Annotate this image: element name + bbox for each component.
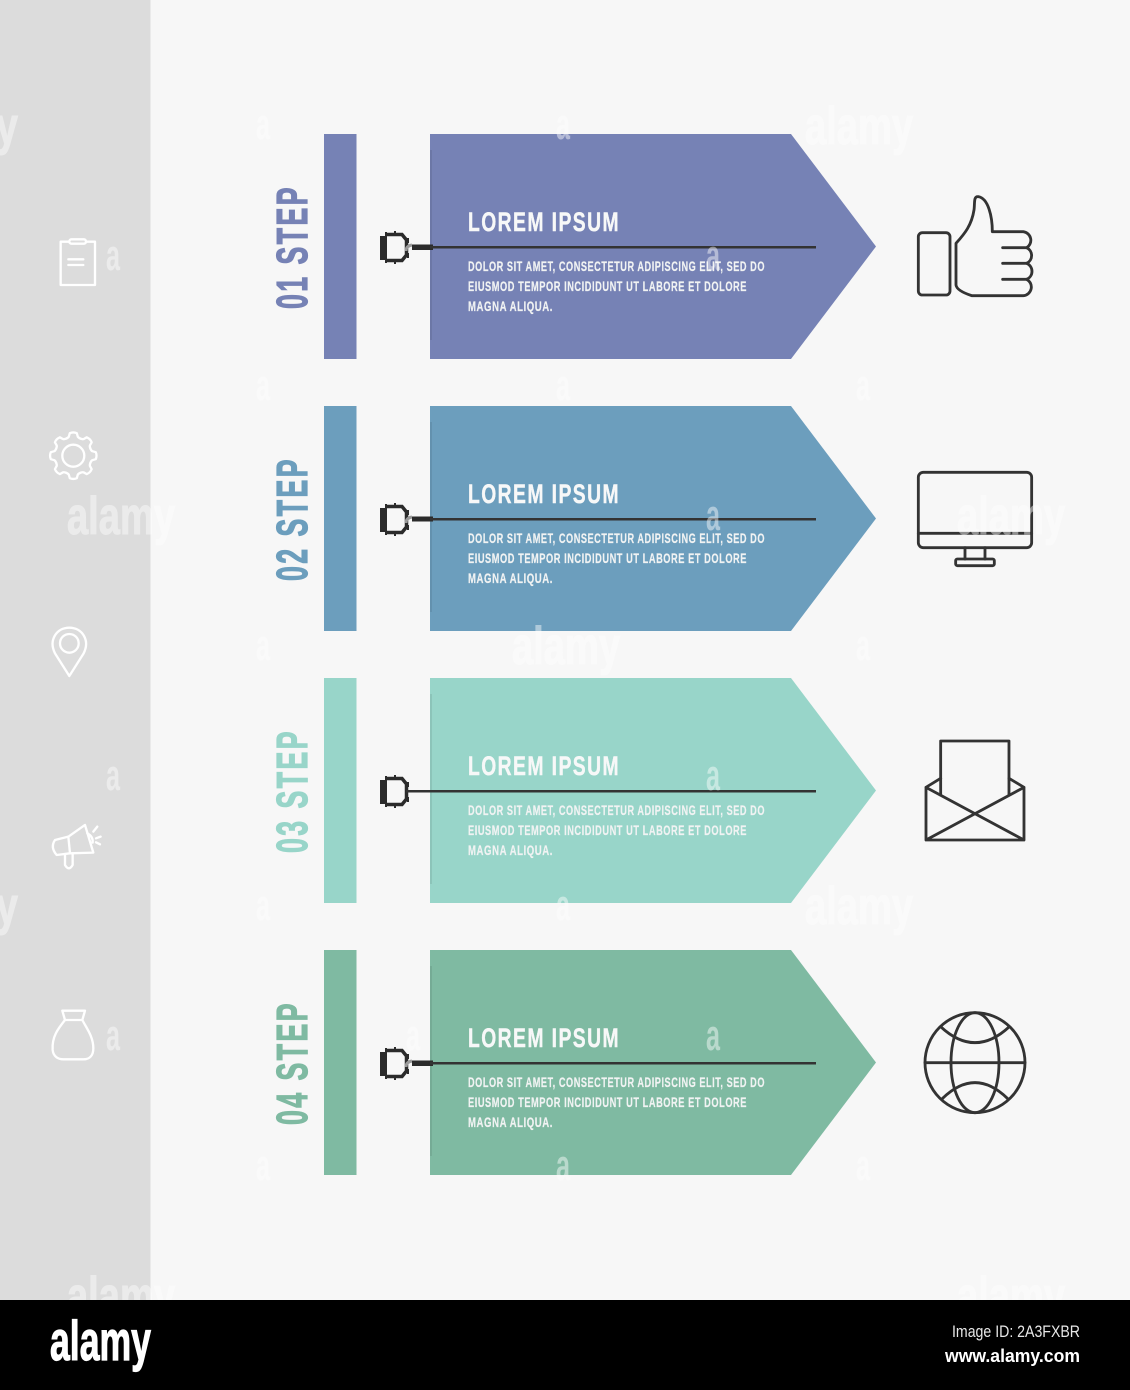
watermarks: a — [706, 1011, 720, 1060]
watermarks: alamy — [805, 97, 913, 156]
sidebar icon: sack — [53, 1011, 93, 1059]
step 2 connector — [380, 503, 816, 536]
watermarks: alamy — [957, 487, 1065, 546]
step 2 body text: EIUSMOD TEMPOR INCIDIDUNT UT LABORE ET DOLORE — [468, 551, 747, 566]
step 2 body text: MAGNA ALIQUA. — [468, 571, 553, 586]
step 1 connector — [380, 231, 816, 264]
icon: globe — [925, 1013, 1025, 1113]
step 3 label: 03 STEP — [268, 729, 317, 853]
watermarks: a — [706, 491, 720, 540]
watermarks: alamy — [512, 617, 620, 676]
step 3 — [268, 678, 1024, 903]
watermarks: a — [556, 881, 570, 930]
watermarks: a — [556, 361, 570, 410]
footer image id: Image ID: 2A3FXBR — [952, 1322, 1080, 1341]
step 4 body text — [468, 1075, 765, 1130]
watermarks: a — [256, 621, 270, 670]
watermarks: a — [406, 1011, 420, 1060]
step 4 bar — [324, 950, 356, 1175]
sidebar icon: megaphone — [53, 825, 101, 868]
watermarks: alamy — [67, 487, 175, 546]
icon: open envelope — [926, 741, 1024, 840]
step 1 bar — [324, 134, 356, 359]
watermarks: a — [556, 1141, 570, 1190]
step 2 bar — [324, 406, 356, 631]
step 2 heading: LOREM IPSUM — [468, 479, 620, 509]
watermarks: a — [556, 100, 570, 149]
step 1 body text: MAGNA ALIQUA. — [468, 299, 553, 314]
step 4 arrow panel — [430, 950, 876, 1175]
step 2 body text: DOLOR SIT AMET, CONSECTETUR ADIPISCING ELIT, SED DO — [468, 531, 765, 546]
step 3 arrow panel — [430, 678, 876, 903]
step 3 body text: DOLOR SIT AMET, CONSECTETUR ADIPISCING ELIT, SED DO — [468, 803, 765, 818]
watermarks: a — [106, 751, 120, 800]
step 1 body text: EIUSMOD TEMPOR INCIDIDUNT UT LABORE ET DOLORE — [468, 279, 747, 294]
watermarks: alamy — [67, 1267, 175, 1326]
watermarks: a — [706, 231, 720, 280]
step 4 body text: EIUSMOD TEMPOR INCIDIDUNT UT LABORE ET DOLORE — [468, 1095, 747, 1110]
watermarks: a — [106, 1011, 120, 1060]
step 1 arrow panel — [430, 134, 876, 359]
step 2 label: 02 STEP — [268, 457, 317, 581]
watermarks: a — [256, 1141, 270, 1190]
step 1 body text — [468, 259, 765, 314]
step 3 body text: MAGNA ALIQUA. — [468, 843, 553, 858]
watermarks: a — [706, 751, 720, 800]
step 1 heading: LOREM IPSUM — [468, 207, 620, 237]
step 1 label: 01 STEP — [268, 185, 317, 309]
step 3 body text — [468, 803, 765, 858]
sidebar icon: clipboard — [61, 239, 95, 285]
panel: left sidebar — [0, 0, 150, 1300]
watermarks: a — [106, 231, 120, 280]
step 4 body text: DOLOR SIT AMET, CONSECTETUR ADIPISCING ELIT, SED DO — [468, 1075, 765, 1090]
step 1 — [268, 134, 1032, 359]
step 4 connector — [380, 1047, 816, 1080]
sidebar icon: location pin — [53, 628, 86, 676]
watermarks: a — [856, 1141, 870, 1190]
icon: thumbs up — [918, 197, 1032, 296]
step 3 connector — [380, 775, 816, 808]
step 3 heading: LOREM IPSUM — [468, 751, 620, 781]
watermarks: a — [256, 100, 270, 149]
footer bar — [0, 1300, 1130, 1390]
watermarks: a — [256, 361, 270, 410]
step 2 — [268, 406, 1032, 631]
step 4 body text: MAGNA ALIQUA. — [468, 1115, 553, 1130]
sidebar icon: gear — [50, 432, 97, 479]
watermarks: alamy — [805, 877, 913, 936]
step 2 arrow panel — [430, 406, 876, 631]
icon: desktop monitor — [918, 472, 1032, 566]
footer website: www.alamy.com — [944, 1346, 1080, 1366]
step 1 body text: DOLOR SIT AMET, CONSECTETUR ADIPISCING ELIT, SED DO — [468, 259, 765, 274]
watermarks: a — [856, 361, 870, 410]
step 2 body text — [468, 531, 765, 586]
watermarks: a — [856, 621, 870, 670]
step 4 — [268, 950, 1025, 1175]
footer logo: alamy — [50, 1309, 151, 1372]
step 4 label: 04 STEP — [268, 1001, 317, 1125]
watermarks: a — [256, 881, 270, 930]
watermarks: alamy — [957, 1267, 1065, 1326]
step 3 body text: EIUSMOD TEMPOR INCIDIDUNT UT LABORE ET DOLORE — [468, 823, 747, 838]
step 3 bar — [324, 678, 356, 903]
step 4 heading: LOREM IPSUM — [468, 1023, 620, 1053]
